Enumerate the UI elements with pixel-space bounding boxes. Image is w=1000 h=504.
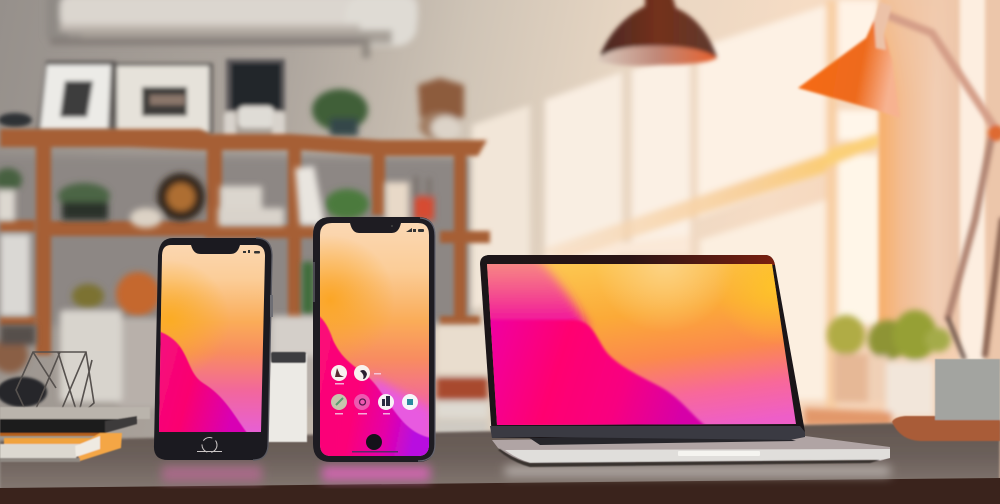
- coffee cup: [268, 352, 307, 442]
- lamp arms: [884, 14, 1000, 358]
- sofa and white cushions behind devices: [0, 310, 496, 438]
- laptop wallpaper: [487, 264, 796, 425]
- phone wallpaper: [159, 245, 265, 432]
- camera dot: [391, 225, 393, 227]
- plant and vase on top shelf: [312, 78, 464, 140]
- app icons: [331, 365, 418, 414]
- lilac lower right area: [370, 375, 432, 458]
- sunlit window patches on wall: [472, 0, 880, 410]
- laptop: [470, 250, 890, 467]
- device reflections: [162, 466, 890, 482]
- left phone: [154, 238, 273, 460]
- plants and pots at right window: [804, 310, 951, 426]
- app labels: [335, 373, 390, 414]
- air conditioner: [46, 0, 418, 58]
- wall column and far-right window: [879, 0, 1000, 370]
- pink wave: [155, 330, 247, 433]
- phone body: [313, 217, 435, 462]
- home button: [366, 434, 382, 450]
- pink wave: [318, 315, 431, 458]
- pink fade upper left: [487, 264, 594, 333]
- shelf objects: [0, 166, 434, 316]
- phone wallpaper: [318, 222, 432, 458]
- pendant lamp: [597, 0, 717, 66]
- phone body: [154, 238, 272, 460]
- geometric ornament and dark object: [0, 352, 94, 420]
- lamp shade: [798, 2, 900, 118]
- pink wave: [480, 320, 707, 427]
- wooden shelving unit: [0, 129, 490, 355]
- picture frames on shelf: [0, 59, 285, 140]
- status bar icons: [406, 228, 424, 232]
- center phone: [313, 217, 435, 462]
- keyboard deck: [492, 436, 890, 467]
- lid: [480, 255, 805, 438]
- home button: [197, 438, 222, 452]
- grey plant pot and saucer: [892, 359, 1000, 441]
- desk surface: [0, 421, 1000, 504]
- orange desk lamp: [798, 2, 1000, 358]
- status bar icons: [243, 250, 260, 254]
- keyboard: [528, 437, 796, 445]
- trackpad: [678, 451, 760, 456]
- stack of books: [0, 407, 150, 462]
